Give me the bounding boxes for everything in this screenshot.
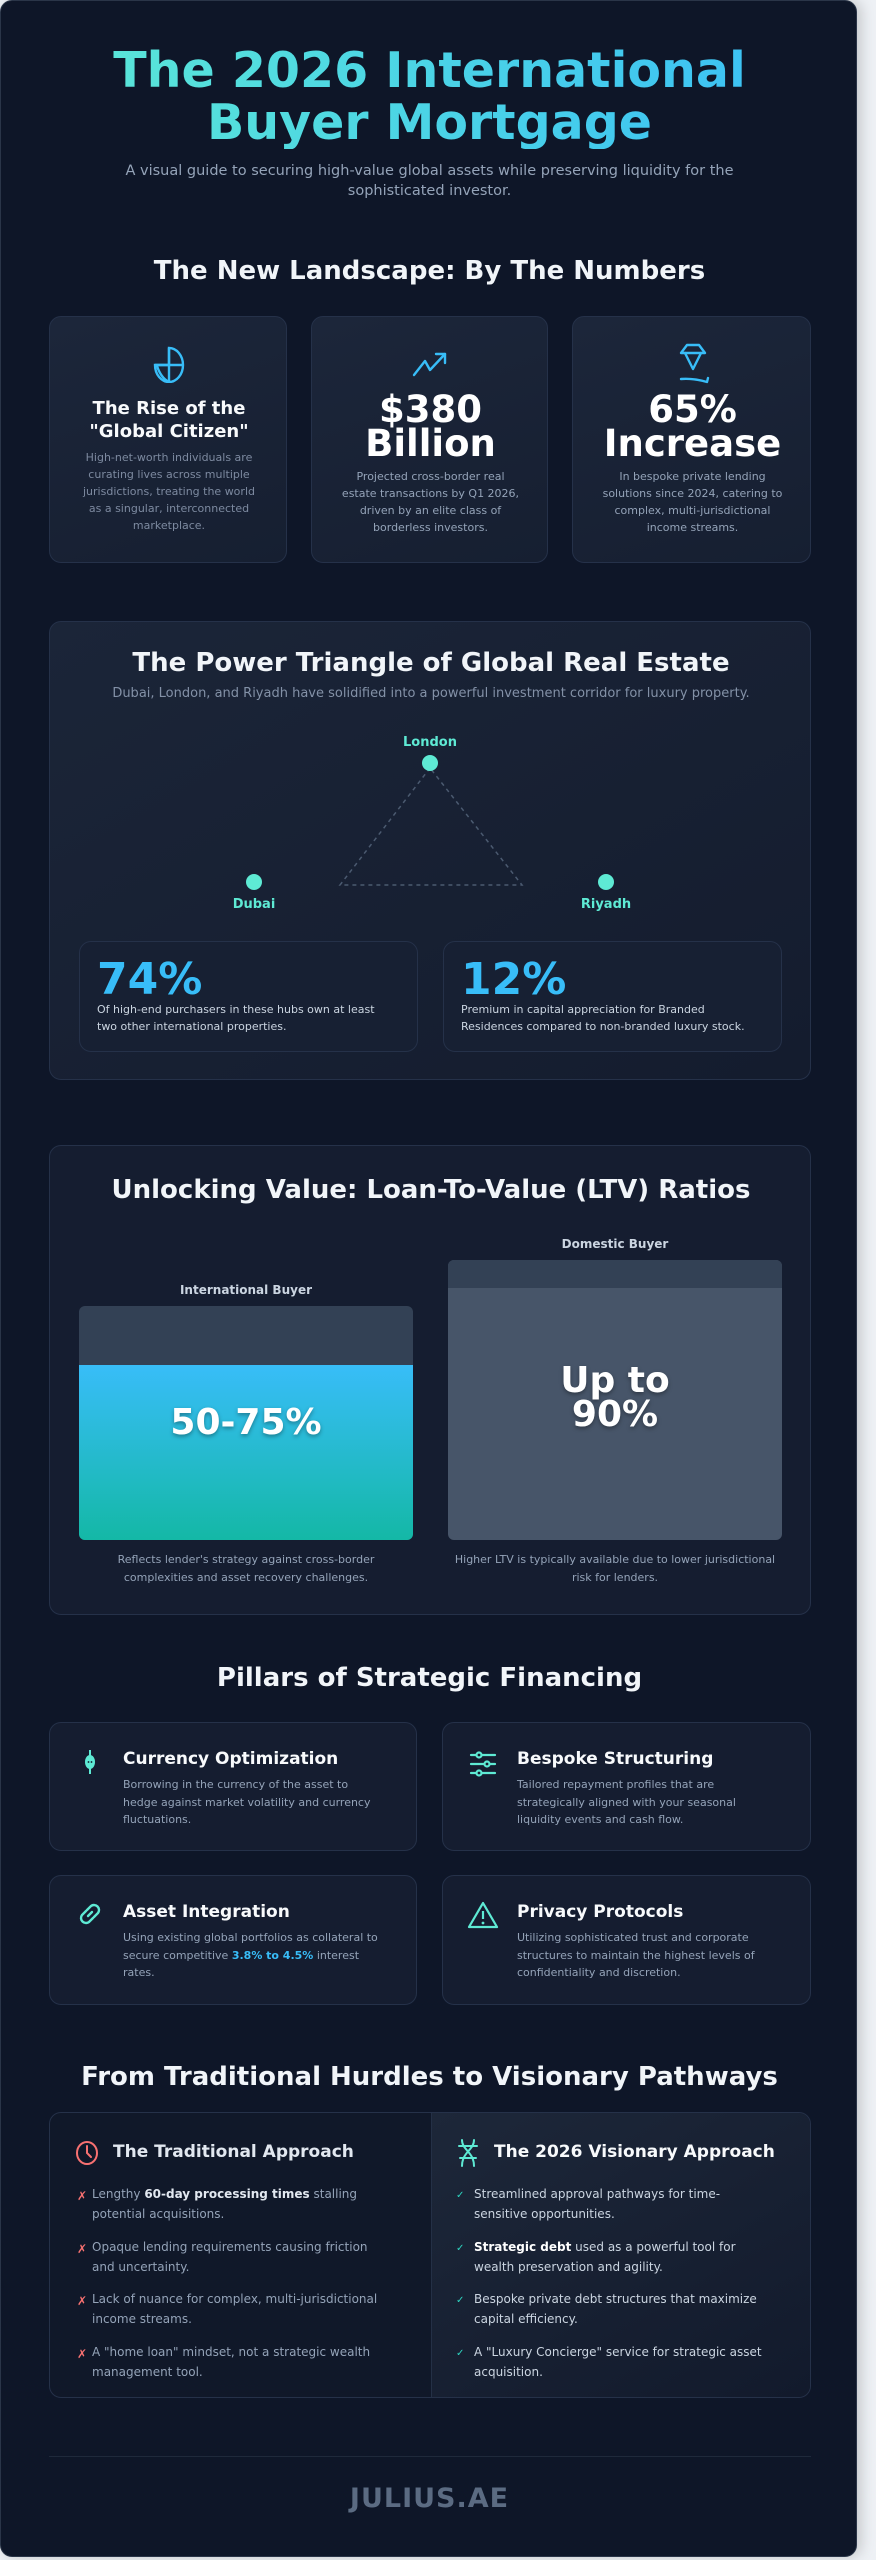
- bar: domestic: Up to: [560, 1360, 670, 1401]
- icon: link: [80, 1904, 100, 1924]
- desc: [342, 470, 519, 534]
- value: [604, 388, 781, 465]
- column: traditional: income streams.: [92, 2312, 192, 2326]
- column: visionary: Bespoke private debt structures that maximize: [474, 2292, 757, 2306]
- title: [89, 398, 249, 442]
- value: 65%: [648, 388, 737, 431]
- column: traditional: ✗: [77, 2347, 87, 2361]
- stat: 12%: [443, 941, 782, 1052]
- desc: driven by an elite class of: [360, 504, 501, 517]
- desc: marketplace.: [133, 519, 205, 532]
- title: Asset Integration: [123, 1902, 290, 1922]
- icon: clock: [76, 2141, 98, 2165]
- column: visionary: acquisition.: [474, 2365, 543, 2379]
- column: visionary: sensitive opportunities.: [474, 2207, 615, 2221]
- desc: Tailored repayment profiles that are: [517, 1778, 714, 1791]
- value: Increase: [604, 422, 781, 465]
- column: traditional: ✗: [77, 2294, 87, 2308]
- column: traditional: ✗: [77, 2189, 87, 2203]
- column: visionary: ✓: [456, 2190, 464, 2201]
- title: "Global Citizen": [89, 421, 249, 442]
- subtitle: A visual guide to securing high-value global assets while preserving liquidity for the: [125, 163, 734, 179]
- column: traditional: Opaque lending requirements causing friction: [92, 2240, 368, 2254]
- title: Bespoke Structuring: [517, 1749, 713, 1769]
- column: visionary: Strategic debt used as a powerful tool for: [474, 2240, 736, 2254]
- column: visionary: ✓: [456, 2243, 464, 2254]
- stat card: $380 billion: [311, 316, 548, 563]
- column: traditional: Lengthy 60-day processing times stalling: [92, 2187, 357, 2201]
- desc: High-net-worth individuals are: [86, 451, 252, 464]
- stat: 12%: Residences compared to non-branded luxury stock.: [461, 1020, 745, 1033]
- Riyadh: Riyadh: [581, 897, 631, 912]
- desc: liquidity events and cash flow.: [517, 1813, 683, 1826]
- desc: borderless investors.: [373, 521, 488, 534]
- desc: fluctuations.: [123, 1813, 191, 1826]
- value: [365, 388, 496, 465]
- desc: [82, 451, 255, 532]
- column: visionary: ✓: [456, 2348, 464, 2359]
- column: visionary: wealth preservation and agility.: [474, 2260, 663, 2274]
- desc: [123, 1931, 378, 1979]
- column: traditional: Lack of nuance for complex, multi-jurisdictional: [92, 2292, 377, 2306]
- pillar: bespoke structuring: [442, 1722, 811, 1851]
- desc: secure competitive 3.8% to 4.5% interest: [123, 1948, 359, 1962]
- London: London: [403, 735, 457, 750]
- desc: In bespoke private lending: [619, 470, 766, 483]
- desc: solutions since 2024, catering to: [603, 487, 782, 500]
- pillar: asset integration: [49, 1875, 417, 2005]
- desc: hedge against market volatility and currency: [123, 1796, 370, 1808]
- icon: sliders: [470, 1751, 496, 1777]
- value: $380: [379, 388, 482, 431]
- icon: warning triangle: [468, 1902, 498, 1928]
- heading: The Power Triangle of Global Real Estate: [132, 648, 730, 678]
- title: Privacy Protocols: [517, 1902, 683, 1922]
- desc: Projected cross-border real: [356, 470, 505, 483]
- caption: domestic: [455, 1553, 775, 1584]
- column: visionary: A "Luxury Concierge" service for strategic asset: [474, 2345, 762, 2359]
- icon: dna: [458, 2139, 478, 2167]
- desc: income streams.: [647, 521, 738, 534]
- column: visionary: ✓: [456, 2295, 464, 2306]
- stat: 74%: [79, 941, 418, 1052]
- column: traditional: A "home loan" mindset, not a strategic wealth: [92, 2345, 370, 2359]
- pillar: currency optimization: [49, 1722, 417, 1851]
- stat: 12%: 12%: [461, 954, 566, 1005]
- triangle diagram: [233, 735, 631, 912]
- column: traditional: and uncertainty.: [92, 2260, 189, 2274]
- subheading: Dubai, London, and Riyadh have solidified into a powerful investment corridor for luxury property.: [112, 686, 750, 701]
- title: The Traditional Approach: [113, 2142, 354, 2162]
- heading: pillars: Pillars of Strategic Financing: [217, 1663, 642, 1693]
- desc: rates.: [123, 1966, 155, 1979]
- heading: Unlocking Value: Loan-To-Value (LTV) Ratios: [112, 1175, 750, 1205]
- icon: globe pie: [154, 346, 184, 383]
- panel: power triangle: [49, 621, 811, 1080]
- bar: international: 50-75%: [170, 1402, 322, 1443]
- desc: [516, 1778, 736, 1826]
- column: traditional: management tool.: [92, 2365, 203, 2379]
- bar: domestic: Domestic Buyer: [562, 1237, 668, 1251]
- stat card: global citizen: [49, 316, 287, 563]
- desc: structures to maintain the highest levels of: [517, 1948, 755, 1962]
- heading: hurdles to pathways: From Traditional Hurdles to Visionary Pathways: [81, 2062, 778, 2092]
- subtitle: [125, 163, 734, 199]
- title: The 2026 International: [113, 42, 746, 99]
- stat: 74%: two other international properties.: [97, 1020, 286, 1033]
- desc: Borrowing in the currency of the asset to: [123, 1778, 348, 1791]
- pillar: privacy protocols: [442, 1875, 811, 2005]
- title: [1, 45, 858, 149]
- caption: international: [118, 1553, 374, 1584]
- desc: [123, 1778, 370, 1826]
- Dubai: [233, 874, 275, 912]
- Dubai: Dubai: [233, 897, 275, 912]
- column: visionary: capital efficiency.: [474, 2312, 578, 2326]
- desc: curating lives across multiple: [88, 468, 250, 481]
- desc: estate transactions by Q1 2026,: [342, 487, 519, 500]
- value: Billion: [365, 422, 496, 465]
- desc: jurisdictions, treating the world: [83, 485, 255, 498]
- column: traditional: [76, 2141, 377, 2379]
- column: visionary: [431, 2113, 812, 2399]
- bar: international: International Buyer: [180, 1283, 312, 1297]
- caption: domestic: risk for lenders.: [572, 1571, 658, 1584]
- subtitle: sophisticated investor.: [348, 183, 511, 199]
- desc: [603, 470, 782, 534]
- desc: Utilizing sophisticated trust and corporate: [517, 1931, 749, 1944]
- London: [403, 735, 457, 771]
- column: traditional: ✗: [77, 2242, 87, 2256]
- stat: 74%: 74%: [97, 954, 202, 1005]
- stat: 12%: Premium in capital appreciation for Branded: [461, 1003, 705, 1016]
- title: The 2026 Visionary Approach: [494, 2142, 775, 2162]
- stat card: 65% increase: [572, 316, 811, 563]
- footer brand: JULIUS.AE: [350, 2483, 509, 2514]
- bar: international: [79, 1283, 413, 1540]
- icon: trend arrow: [412, 352, 446, 376]
- column: visionary: Streamlined approval pathways for time-: [474, 2187, 720, 2201]
- desc: Using existing global portfolios as collateral to: [123, 1931, 378, 1944]
- icon: scale: [680, 344, 710, 384]
- column: traditional: potential acquisitions.: [92, 2207, 224, 2221]
- caption: international: complexities and asset recovery challenges.: [124, 1571, 368, 1584]
- panel: comparison: [49, 2112, 811, 2398]
- bar: domestic: [448, 1237, 782, 1540]
- stat: 74%: Of high-end purchasers in these hubs own at least: [97, 1003, 375, 1016]
- icon: coin: [85, 1750, 95, 1774]
- caption: domestic: Higher LTV is typically available due to lower jurisdictional: [455, 1553, 775, 1566]
- title: Currency Optimization: [123, 1749, 338, 1769]
- desc: complex, multi-jurisdictional: [614, 504, 770, 517]
- list: [456, 2187, 762, 2379]
- title: The Rise of the: [93, 398, 245, 419]
- caption: international: Reflects lender's strategy against cross-border: [118, 1553, 374, 1566]
- list: [77, 2187, 377, 2379]
- desc: confidentiality and discretion.: [517, 1966, 681, 1979]
- heading: new landscape: The New Landscape: By The Numbers: [154, 256, 705, 286]
- desc: as a singular, interconnected: [89, 502, 249, 515]
- desc: [517, 1931, 755, 1979]
- bar: domestic: 90%: [572, 1394, 658, 1435]
- panel: LTV ratios: [49, 1145, 811, 1615]
- Riyadh: [581, 874, 631, 912]
- title: Buyer Mortgage: [207, 94, 652, 151]
- desc: strategically aligned with your seasonal: [517, 1796, 736, 1808]
